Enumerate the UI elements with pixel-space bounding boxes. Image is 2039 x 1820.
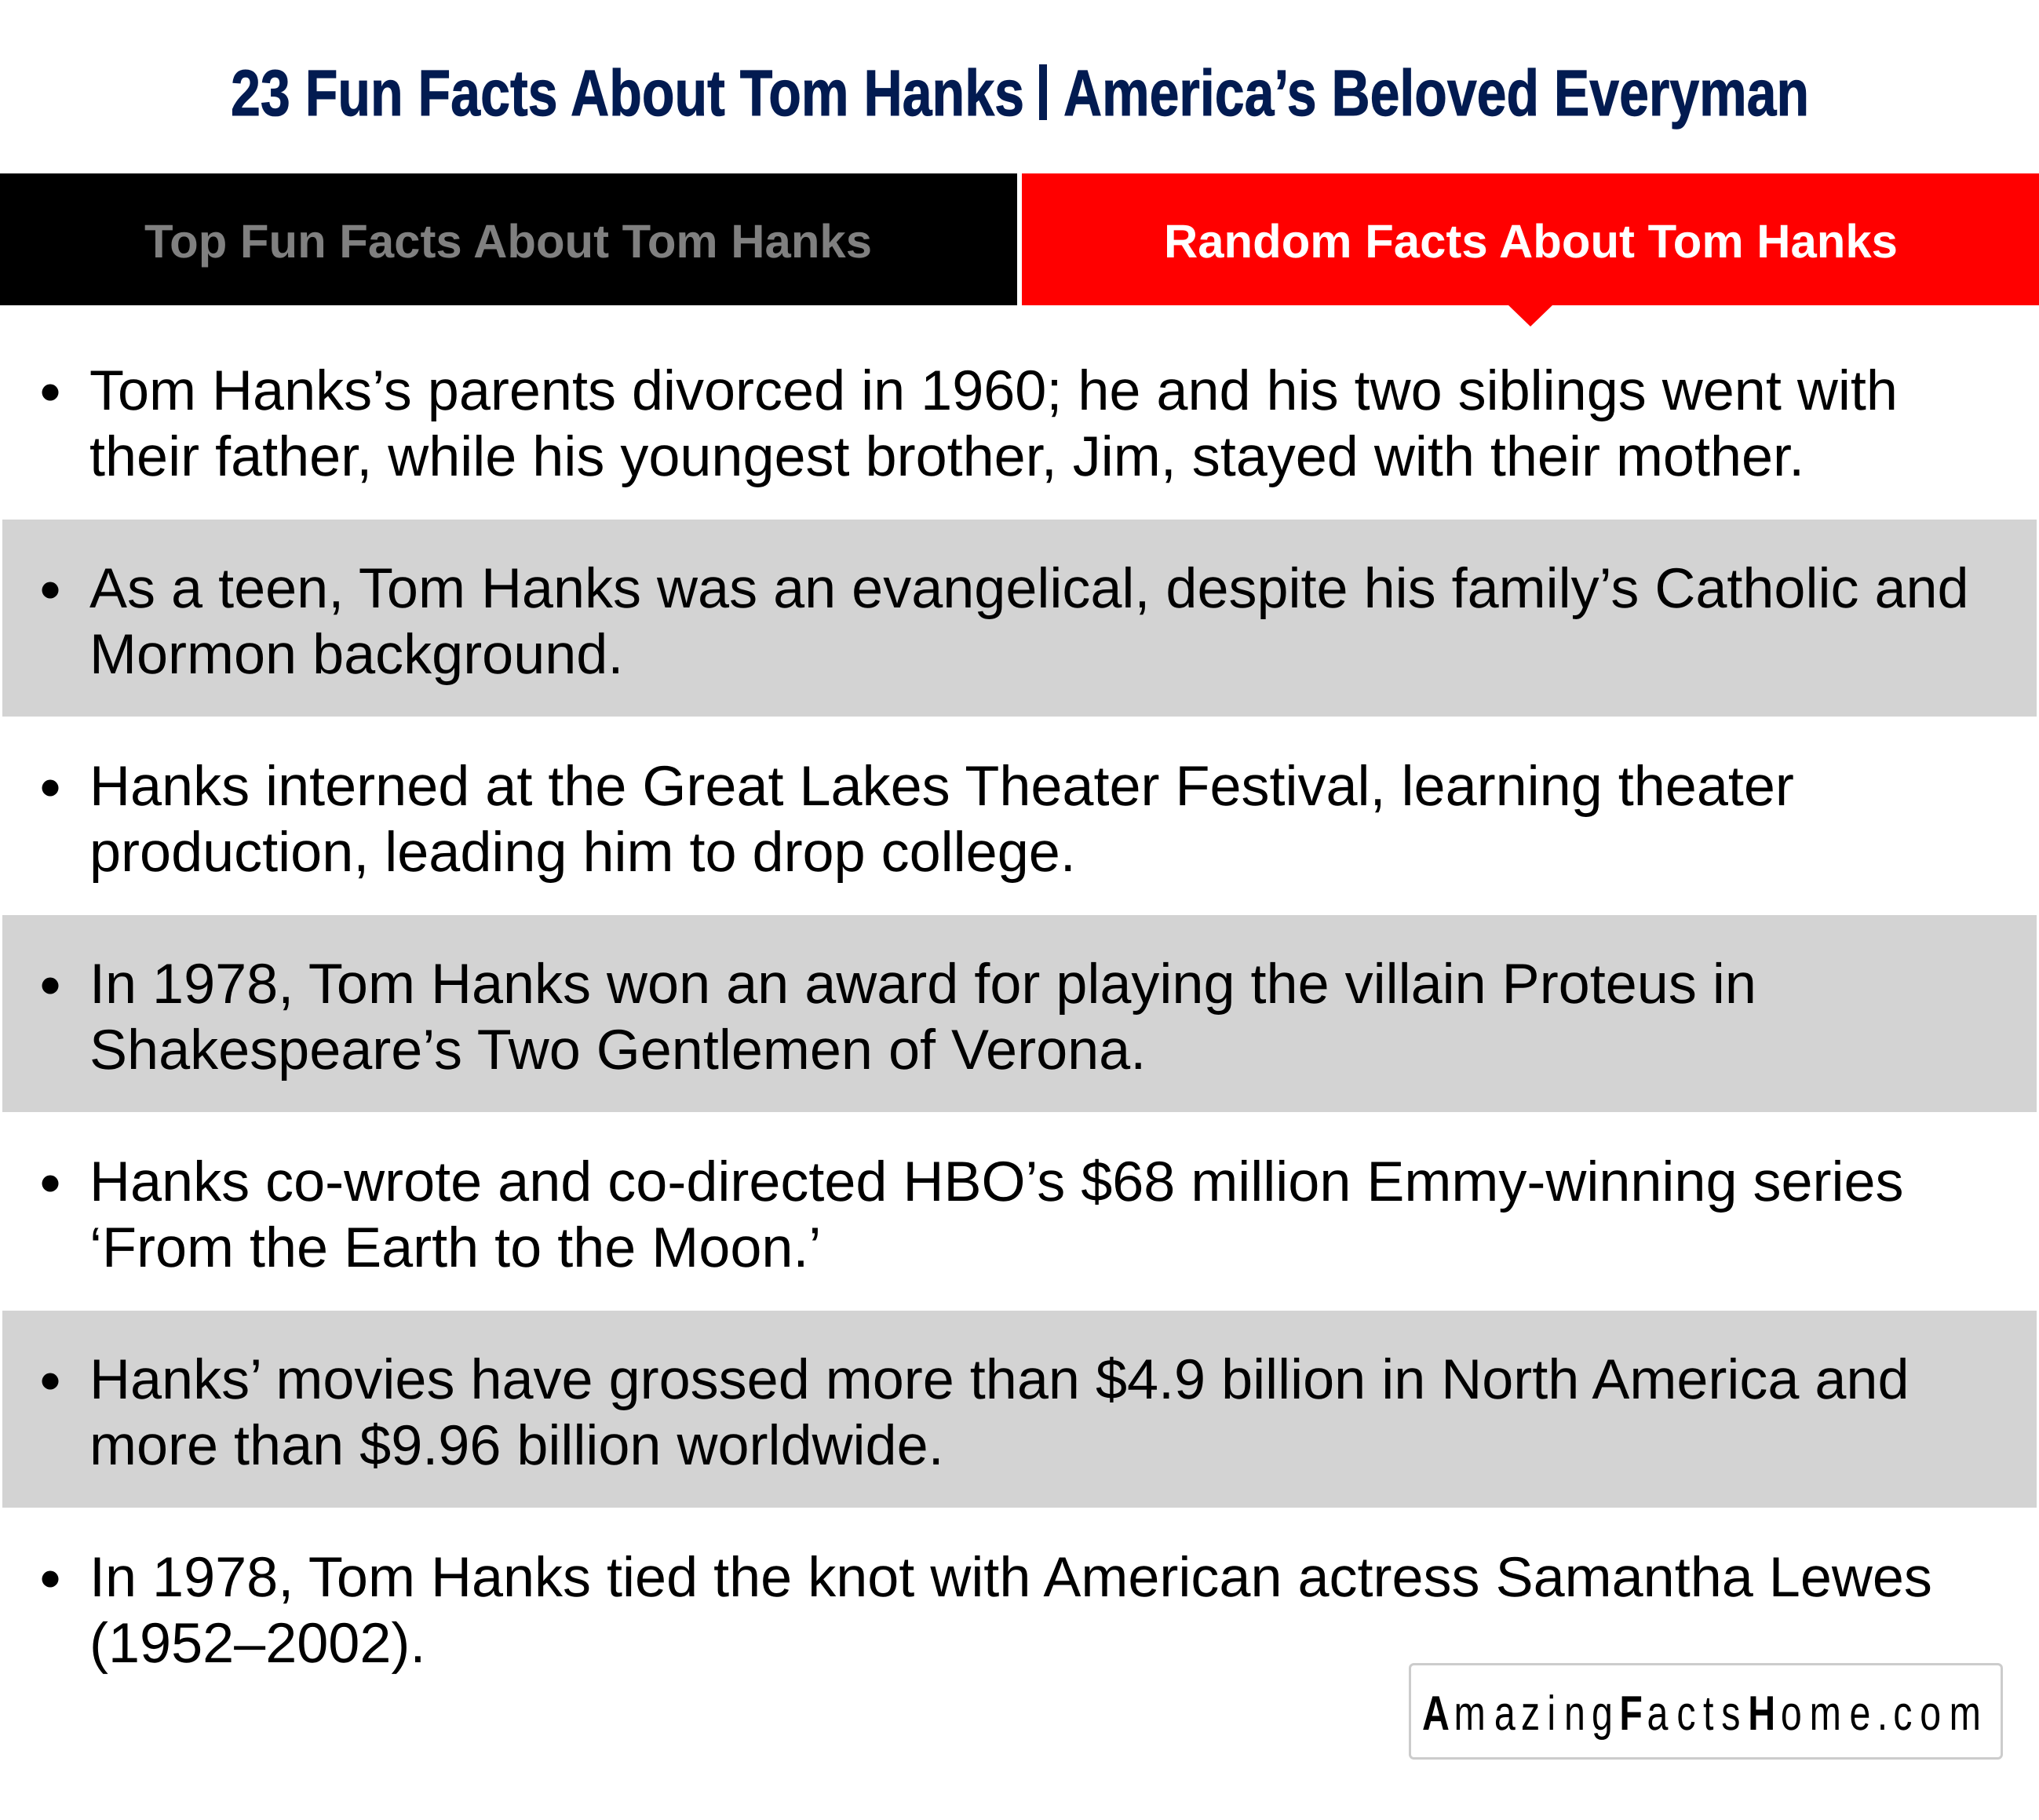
fact 2: Mormon background.: [89, 623, 623, 686]
fact 7: [42, 1546, 1932, 1675]
fact 2: As a teen, Tom Hanks was an evangelical, despite his family’s Catholic and: [89, 557, 1969, 620]
tab: top fun facts: Top Fun Facts About Tom Hanks: [144, 215, 872, 268]
logo: AmazingFactsHome.com: acts: [1647, 1687, 1740, 1741]
fact 7: (1952–2002).: [89, 1612, 425, 1675]
tab: random facts (active): Random Facts About Tom Hanks: [1164, 215, 1898, 268]
fact 2: [2, 520, 2037, 717]
logo: AmazingFactsHome.com: A: [1422, 1687, 1450, 1741]
fact 5: Hanks co-wrote and co-directed HBO’s $68 million Emmy-winning series: [89, 1151, 1904, 1213]
fact 4: [2, 915, 2037, 1112]
logo: AmazingFactsHome.com: F: [1619, 1687, 1643, 1741]
title: [231, 57, 1809, 129]
fact 5: ‘From the Earth to the Moon.’: [89, 1216, 821, 1279]
fact 5: [42, 1151, 1904, 1279]
title: 23 Fun Facts About Tom Hanks: [231, 57, 1024, 129]
fact 1: [42, 359, 1898, 488]
fact 6: [2, 1311, 2037, 1508]
fact 4: In 1978, Tom Hanks won an award for playing the villain Proteus in: [89, 953, 1756, 1016]
fact 1: Tom Hanks’s parents divorced in 1960; he and his two siblings went with: [89, 359, 1898, 422]
fact 6: Hanks’ movies have grossed more than $4.9 billion in North America and: [89, 1348, 1910, 1411]
fact 7: In 1978, Tom Hanks tied the knot with American actress Samantha Lewes: [89, 1546, 1932, 1609]
logo: AmazingFactsHome.com: ome.com: [1781, 1687, 1981, 1741]
title: America’s Beloved Everyman: [1063, 57, 1809, 129]
fact 1: their father, while his youngest brother, Jim, stayed with their mother.: [89, 425, 1804, 488]
fact 3: [42, 755, 1794, 884]
tab: top fun facts: [0, 173, 1017, 305]
fact 3: production, leading him to drop college.: [89, 821, 1076, 884]
tab: random facts (active): [1022, 173, 2039, 326]
logo: AmazingFactsHome.com: H: [1748, 1687, 1775, 1741]
fact 3: Hanks interned at the Great Lakes Theater Festival, learning theater: [89, 755, 1794, 818]
logo: AmazingFactsHome.com: [1410, 1664, 2001, 1758]
fact 6: more than $9.96 billion worldwide.: [89, 1414, 944, 1477]
fact 4: Shakespeare’s Two Gentlemen of Verona.: [89, 1019, 1146, 1081]
logo: AmazingFactsHome.com: mazing: [1454, 1687, 1613, 1741]
